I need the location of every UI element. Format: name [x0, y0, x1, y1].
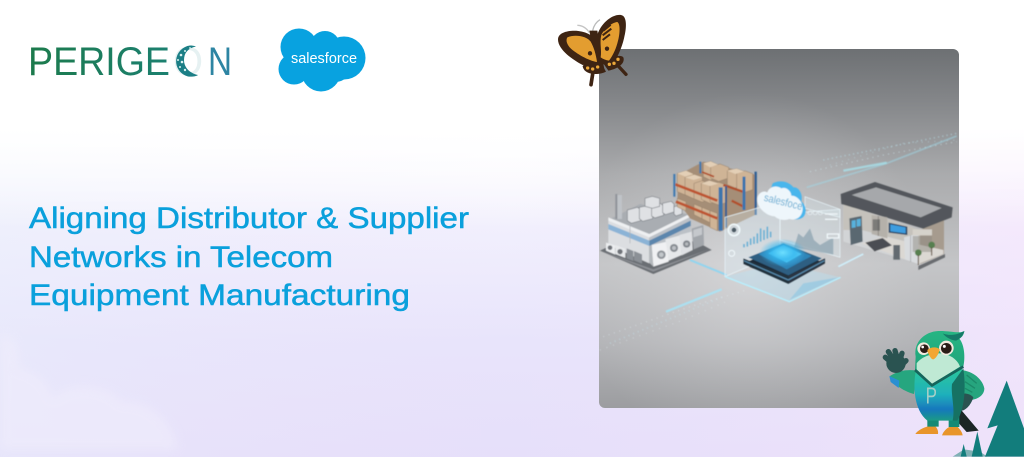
logo: Salesforce: salesforce: [291, 51, 357, 67]
tail: [957, 409, 979, 432]
logo: Salesforce: [278, 28, 366, 92]
title: Equipment Manufacturing: [29, 279, 410, 312]
dashboard panels: [725, 197, 840, 277]
body: [914, 368, 964, 421]
icon: salesforce cloud: salesfoce: [763, 192, 804, 213]
title: Aligning Distributor & Supplier: [29, 202, 469, 235]
data streams: [600, 133, 957, 350]
logo: Perigeon: [28, 40, 232, 84]
right wing: [956, 370, 984, 400]
letter P: P: [926, 383, 937, 409]
icon: trees: [953, 381, 1024, 457]
icon: butterfly: [558, 15, 626, 85]
beak: [927, 347, 940, 359]
background clouds: [0, 335, 178, 450]
platform: [725, 239, 841, 302]
icon: owl mascot: [885, 331, 984, 435]
warehouse racks: [674, 161, 757, 232]
panel: illustration: [599, 49, 959, 408]
icon: salesforce cloud: [757, 181, 806, 220]
store: [841, 182, 953, 270]
head: [915, 331, 964, 387]
dashboard panels: OOG: [807, 210, 823, 217]
left wing: [890, 370, 917, 394]
hand: [885, 351, 906, 373]
title: [29, 202, 469, 312]
eyes: [917, 342, 930, 355]
title: Networks in Telecom: [29, 241, 333, 274]
logo wordmark: PERIGE: [28, 40, 170, 84]
icon: moon letter O: O: [173, 40, 203, 84]
factory: [600, 194, 712, 274]
logo letter N: N: [208, 40, 232, 84]
feet: [915, 426, 963, 435]
